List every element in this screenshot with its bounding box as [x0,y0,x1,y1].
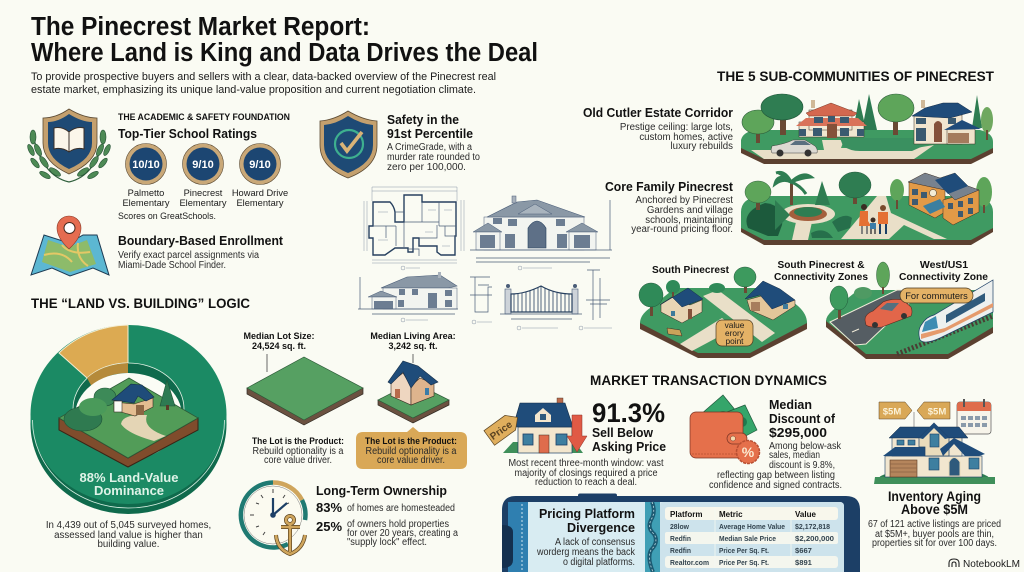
block: long-term ownership: of owners hold properties [347,519,449,530]
callout: value entry point: point [726,336,744,346]
title: Where Land is King and Data Drives the Deal [31,39,538,67]
table: platform pricing: 28low [670,522,689,531]
icon: luxury house with $5M tags and calendar [874,399,995,484]
block: boundary-based enrollment: Verify exact parcel assignments via [118,250,260,261]
text: three-month window: majority of closings required a price [514,468,658,479]
table: platform pricing: $891 [795,558,813,567]
table: platform pricing: $2,172,818 [795,522,830,531]
callout: value entry point: value [725,320,745,330]
block: boundary-based enrollment: Boundary-Based Enrollment [118,233,284,248]
callout: for commuters [900,288,973,303]
icon: car [771,140,817,156]
chart: 88% land-value donut: 88% Land-Value [80,470,178,485]
badge: Pinecrest [179,144,227,208]
badge: Howard Drive: 9/10 [249,159,271,171]
block: long-term ownership: 25% [316,519,342,534]
block: long-term ownership: for over 20 years, creating a [347,528,459,539]
callout: the lot is the product: core value driver. [377,455,445,466]
text: below-ask discount: confidence and signed contracts. [709,480,842,491]
icon: clock and anchor [241,482,305,554]
text: divergence description [536,537,635,568]
icon: house with price tag and down arrow [484,398,587,453]
block: Core Family Pinecrest: Gardens and village [647,205,733,216]
table: platform pricing: Value [795,510,816,519]
section heading: sub-communities: THE 5 SUB-COMMUNITIES OF PINECREST [717,69,995,84]
table: platform pricing: Price Per Sq. Ft. [719,558,769,567]
label: West/US1 connectivity zone: West/US1 [920,259,968,271]
text: active listings [868,519,1001,549]
stat: 91.3% sell below asking price: 91.3% [592,398,665,428]
section heading: academic and safety: THE ACADEMIC & SAFETY FOUNDATION [118,112,290,122]
badge: Howard Drive: Howard Drive [232,188,288,198]
table: platform pricing: Realtor.com [670,558,709,567]
callout: the lot is the product [356,427,467,469]
intro text: estate market, emphasizing its unique land-value proposition and current negotiation climate. [31,84,476,96]
house: blue-roof estate [912,100,981,144]
badge: Howard Drive [232,144,288,208]
block: safety percentile: murder rate rounded to [387,152,480,163]
icon: commuter train [919,280,993,342]
icon: house on lot [378,361,449,423]
table: platform pricing: $667 [795,546,812,555]
text: active listings: properties sit for over 100 days. [872,538,997,549]
text: divergence description: A lack of consensus [555,537,635,548]
text: the lot is the product [252,436,344,466]
text: active listings: at $5M+, buyer pools are thin, [875,529,994,540]
text: land value caption: assessed land value is higher than [54,530,203,541]
railway track [897,316,993,354]
blueprint: gate detail [470,270,612,330]
icon: wallet with cash and percent [690,395,760,464]
stat: inventory aging above $5M: Above $5M [901,502,968,517]
text: the lot is the product: core value driver. [264,455,332,466]
chart: 88% land-value donut [30,325,226,514]
trees [830,262,890,319]
title: The Pinecrest Market Report: [31,13,370,41]
text: active listings: 67 of 121 active listings are priced [868,519,1001,530]
block: long-term ownership: of homes are homesteaded [347,503,455,514]
block: long-term ownership [316,483,459,548]
trees [639,267,756,316]
block: Core Family Pinecrest: year-round pricing floor. [631,224,733,235]
icon: family [859,204,888,234]
scene: Core Family gardens and school [741,172,993,245]
block: safety percentile: 91st Percentile [387,126,473,141]
block: Old Cutler Estate Corridor: Old Cutler Estate Corridor [583,105,733,120]
text: three-month window: reduction to reach a deal. [535,477,637,488]
section heading: market transaction dynamics: MARKET TRANSACTION DYNAMICS [590,373,827,388]
text: below-ask discount: Among below-ask [769,441,841,452]
heading: school ratings: Top-Tier School Ratings [118,126,257,141]
badge: Palmetto: 10/10 [132,159,160,171]
trees and palm [745,172,992,213]
table: platform pricing: Price Per Sq. Ft. [719,546,769,555]
block: Old Cutler Estate Corridor: custom homes, active [639,132,733,143]
icon: wallet with cash and percent: % [742,444,755,460]
school rating badges [122,144,288,208]
heading: pricing platform divergence [539,506,635,535]
label: median lot size: Median Lot Size: [243,331,315,341]
land block with house [59,378,198,467]
text: land value caption: In 4,439 out of 5,045 surveyed homes, [46,520,211,531]
stat: inventory aging above $5M: Inventory Aging [888,489,981,504]
callout: for commuters: For commuters [905,291,968,301]
label: South Pinecrest: South Pinecrest [652,264,729,276]
text: three-month window: Most recent three-month window: vast [508,458,664,469]
icon: car [865,299,912,328]
label: West/US1 connectivity zone: Connectivity Zone [899,271,988,283]
text: below-ask discount [709,441,842,491]
heading: pricing platform divergence: Pricing Platform [539,506,635,521]
text: land value caption [46,520,211,550]
house: left cottage [660,288,703,323]
block: Core Family Pinecrest: Anchored by Pinecrest [636,195,733,206]
house: terracotta villa [796,100,867,138]
label: median living area: Median Living Area: [370,331,456,341]
table: platform pricing [660,502,844,572]
block: Core Family Pinecrest: schools, maintaining [645,215,733,226]
block: Old Cutler Estate Corridor: Prestige ceiling: large lots, [620,122,733,133]
text: three-month window [508,458,664,488]
house: right home [745,281,795,320]
scene: South Pinecrest neighborhood [639,267,807,358]
intro text: To provide prospective buyers and sellers with a clear, data-backed overview of the Pinecrest real [31,71,496,83]
table: platform pricing: Metric [719,510,743,519]
text: below-ask discount: reflecting gap between listing [717,470,835,481]
block: safety percentile [387,112,480,173]
table: platform pricing: Median Sale Price [719,534,776,543]
block: long-term ownership: Long-Term Ownership [316,483,447,498]
scene: Old Cutler estates [741,94,993,164]
section heading: land vs building: THE “LAND VS. BUILDING” LOGIC [31,296,250,311]
block: boundary-based enrollment: Miami-Dade School Finder. [118,260,226,271]
badge: Pinecrest: 9/10 [192,159,214,171]
block: boundary-based enrollment [118,233,284,271]
road strip [645,502,660,572]
stat: median discount: Discount of [769,411,836,426]
heading: pricing platform divergence: Divergence [567,520,635,535]
block: Old Cutler Estate Corridor [583,105,733,152]
block: Core Family Pinecrest: Core Family Pinecrest [605,179,734,194]
text: below-ask discount: sales, median [769,450,820,461]
label: South Pinecrest and connectivity zones: Connectivity Zones [774,271,868,283]
price tag: Price [488,419,515,443]
callout: the lot is the product: The Lot is the Product: [365,436,457,446]
callout: value entry point [716,320,753,346]
label: median lot size [243,331,315,372]
price tags [879,402,950,430]
sign [667,328,682,336]
stat: 91.3% sell below asking price: Asking Price [592,439,666,454]
table: platform pricing: Redfin [670,534,691,543]
stat: inventory aging above $5M [888,489,981,517]
note: GreatSchools: Scores on GreatSchools. [118,211,216,222]
icon: empty lot [247,357,363,425]
icon: map with pin [31,216,109,276]
blueprint: front elevation [470,196,612,270]
table: platform pricing: Average Home Value [719,522,785,531]
badge: Pinecrest: Pinecrest [184,188,223,198]
text: below-ask discount: discount is 9.8%, [769,460,835,471]
block: safety percentile: A CrimeGrade, with a [387,142,473,153]
text: land value caption: building value. [98,539,159,550]
badge: Palmetto: Elementary [122,198,170,208]
panel: phone with pricing platform divergence [502,494,860,572]
title [31,13,538,67]
logo: NotebookLM: NotebookLM [963,558,1020,570]
text: divergence description: o digital platforms. [563,557,635,568]
price tags: $5M [928,406,946,418]
block: long-term ownership: "supply lock" effect. [347,537,427,548]
block: Old Cutler Estate Corridor: luxury rebuilds [671,141,733,152]
label: median living area [370,331,456,363]
label: median lot size: 24,524 sq. ft. [252,341,306,351]
price tags: $5M [883,406,901,418]
stat: median discount: $295,000 [769,425,827,440]
architectural blueprints [358,187,612,330]
callout: value entry point: erory [725,328,745,338]
badge: Howard Drive: Elementary [236,198,284,208]
text: the lot is the product: The Lot is the Product: [252,436,344,446]
scene: West/US1 road and train [826,262,993,359]
icon: school building [908,173,979,225]
trees [742,94,993,143]
blueprint: rear elevation [358,272,458,322]
stat: 91.3% sell below asking price: Sell Below [592,425,654,440]
block: safety percentile: Safety in the [387,112,459,127]
badge: Pinecrest: Elementary [179,198,227,208]
label: South Pinecrest and connectivity zones [774,259,868,283]
icon: safety shield with check [320,111,377,178]
chart: 88% land-value donut: Dominance [94,483,164,498]
text: divergence description: worderg means the back [536,547,635,558]
label: median living area: 3,242 sq. ft. [388,341,438,351]
text: the lot is the product: Rebuild optionality is a [252,446,344,457]
table: platform pricing: $2,200,000 [795,534,834,543]
table: platform pricing: Platform [670,510,702,519]
stat: 91.3% sell below asking price [592,398,666,454]
block: safety percentile: zero per 100,000. [387,162,466,173]
stat: median discount [769,397,836,440]
intro text [31,71,496,96]
label: West/US1 connectivity zone [899,259,988,283]
stat: median discount: Median [769,397,812,412]
table: platform pricing: Redfin [670,546,691,555]
callout: the lot is the product: Rebuild optionality is a [366,446,457,457]
left phone strip [502,502,528,572]
block: long-term ownership: 83% [316,500,342,515]
blueprint: floor plan [364,187,464,270]
icon: academic shield with book and laurel [26,109,112,182]
badge: Palmetto: Palmetto [128,188,164,198]
label: South Pinecrest and connectivity zones: South Pinecrest & [778,259,865,271]
badge: Palmetto [122,144,170,208]
block: Core Family Pinecrest [605,179,734,235]
calendar [957,399,991,434]
